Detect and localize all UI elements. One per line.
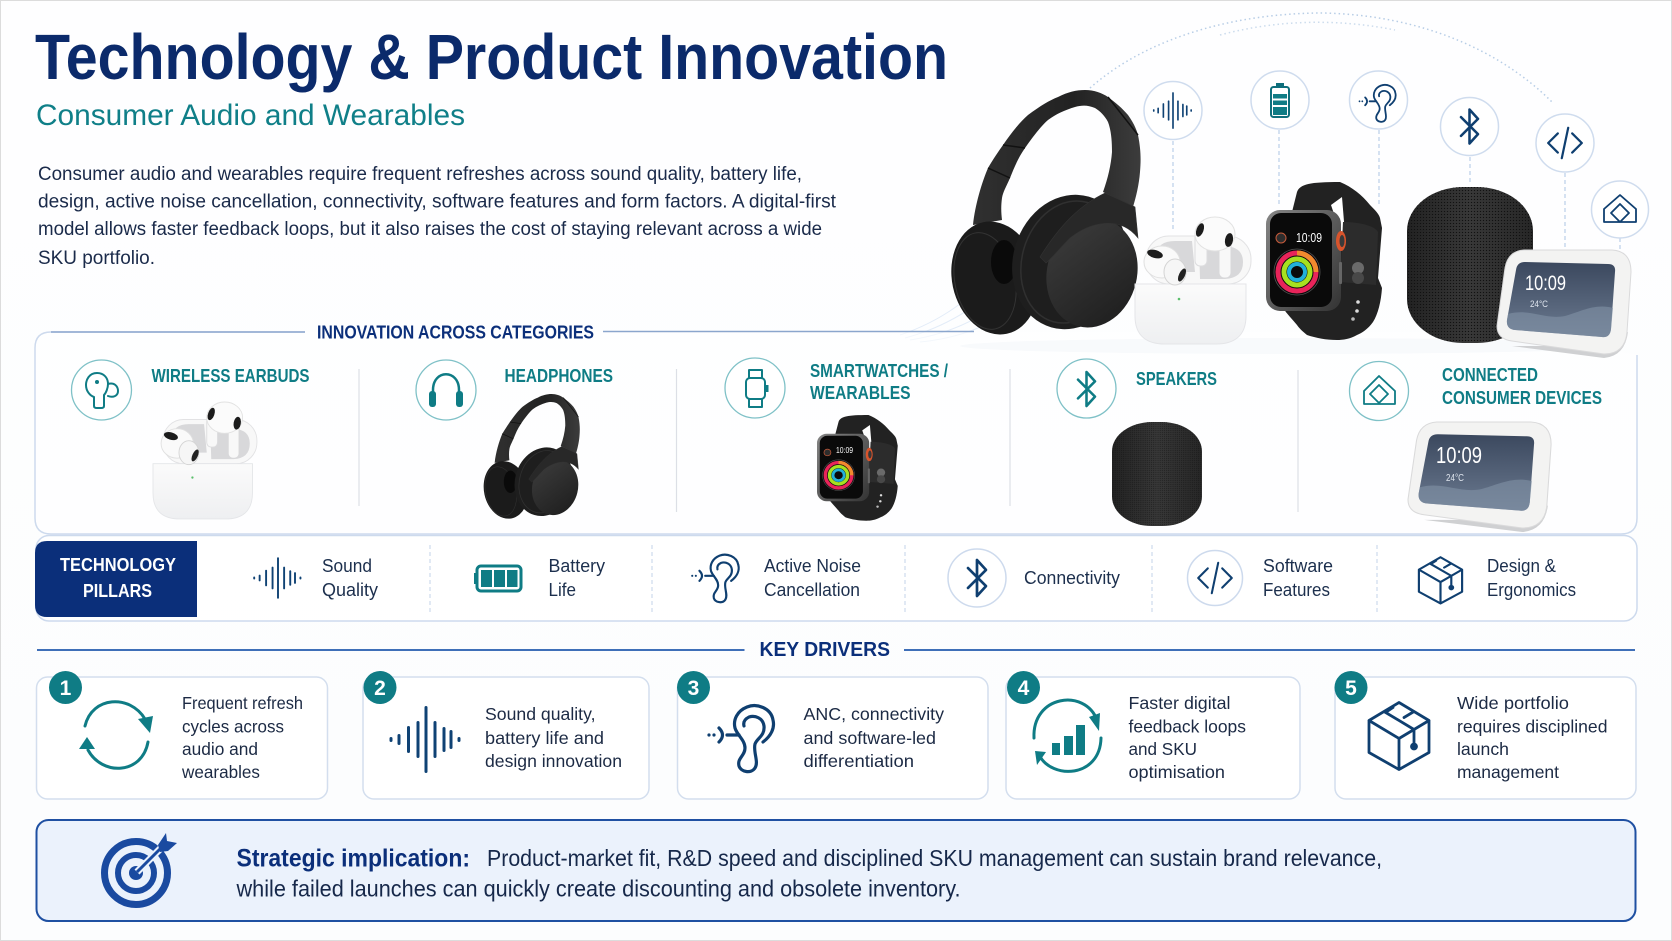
driver card 4 (1006, 671, 1300, 799)
hero icon: sound wave (1144, 82, 1202, 140)
dotted arc over hero icons (1090, 13, 1552, 102)
pillar: sound quality (254, 556, 378, 600)
category: headphones (416, 360, 613, 523)
section heading: key drivers: KEY DRIVERS (760, 639, 890, 661)
driver card 2: design innovation (485, 751, 622, 771)
category: headphones: HEADPHONES (504, 366, 613, 386)
category: connected consumer devices: CONNECTED (1442, 365, 1538, 385)
pillar: battery life: Battery (548, 556, 605, 576)
category: smartwatches and wearables: WEARABLES (810, 383, 910, 403)
driver card 1: audio and (182, 739, 258, 759)
driver card 5: requires disciplined (1457, 716, 1608, 736)
hero product: smartwatch: 10:09 (1296, 230, 1322, 245)
pillar: active noise cancellation (692, 555, 861, 602)
intro text block: model allows faster feedback loops, but it also raises the cost of staying relevant across a wide (38, 219, 822, 240)
intro text block: design, active noise cancellation, connectivity, software features and form factors. A digital-first (38, 192, 837, 212)
pillar: battery life: Life (548, 580, 576, 600)
hero icon: connected home (1592, 181, 1648, 238)
category: wireless earbuds (72, 360, 310, 519)
driver card 5: launch (1457, 739, 1509, 759)
driver card 5: management (1457, 762, 1559, 782)
pillar: connectivity: Connectivity (1024, 568, 1120, 588)
icon: refresh cycle (79, 702, 153, 768)
driver card 4: feedback loops (1128, 716, 1246, 736)
floor reflection under hero products (960, 338, 1620, 354)
pillar: software features: Software (1263, 556, 1333, 576)
category: wireless earbuds: WIRELESS EARBUDS (152, 366, 310, 386)
category: smartwatches and wearables (725, 358, 948, 521)
hero product: earbuds (1135, 217, 1251, 344)
driver card 5: Wide portfolio (1457, 693, 1569, 713)
driver card 3 (677, 671, 988, 799)
driver card 2: 2 (374, 677, 386, 700)
driver card 1: Frequent refresh (182, 693, 303, 713)
driver card 2: Sound quality, (485, 704, 596, 724)
pillar: sound quality: Quality (322, 580, 378, 600)
hero product: smartwatch (1266, 182, 1382, 340)
pillars label: PILLARS (83, 581, 152, 601)
intro text block (38, 164, 837, 269)
driver card 1: wearables (181, 762, 260, 782)
icon: feedback loop chart (1034, 700, 1101, 771)
pillar: design and ergonomics (1419, 556, 1576, 603)
pillar: software features (1188, 550, 1333, 606)
category: speakers (1057, 359, 1217, 526)
driver card 4: optimisation (1128, 762, 1225, 782)
strategic implication callout: Strategic implication: (236, 844, 470, 872)
icon: target with arrow (104, 833, 177, 904)
strategic implication callout: Product-market fit, R&D speed and disciplined SKU management can sustain brand relevance, (487, 845, 1382, 871)
category: speakers: SPEAKERS (1136, 369, 1217, 389)
hero product: headphones (941, 90, 1149, 343)
pillar: battery life (474, 556, 605, 600)
connector lines from icons to products (1173, 130, 1620, 250)
driver card 2: battery life and (485, 728, 604, 748)
pillar: sound quality: Sound (322, 556, 372, 576)
title: Technology & Product Innovation (35, 21, 948, 93)
driver card 4: 4 (1018, 677, 1030, 700)
panel: technology pillars (35, 536, 1637, 621)
pillar: design and ergonomics: Ergonomics (1487, 580, 1576, 600)
driver card 3: differentiation (804, 751, 914, 771)
pillar: active noise cancellation: Active Noise (764, 556, 861, 576)
pillars label: TECHNOLOGY (60, 555, 176, 575)
driver card 4: Faster digital (1128, 693, 1230, 713)
pillars label (35, 541, 197, 617)
category: smartwatches and wearables: 10:09 (836, 446, 853, 455)
driver card 5 (1334, 671, 1636, 799)
category: connected consumer devices: 10:09 (1436, 442, 1482, 468)
driver card 2 (363, 671, 649, 799)
panel: innovation categories (35, 332, 1637, 534)
icon: product box (1369, 702, 1429, 770)
pillar: active noise cancellation: Cancellation (764, 580, 860, 600)
strategic implication callout: while failed launches can quickly create discounting and obsolete inventory. (236, 876, 961, 902)
category: smartwatches and wearables: SMARTWATCHES / (810, 361, 948, 381)
hero icon: bluetooth (1440, 98, 1498, 156)
intro text block: SKU portfolio. (38, 248, 155, 269)
hero product: smart display (1497, 250, 1631, 358)
pillar: design and ergonomics: Design & (1487, 556, 1556, 576)
pillar: connectivity (948, 549, 1120, 607)
hero product: smart display: 10:09 (1525, 272, 1566, 295)
hero product: smart speaker (1407, 187, 1533, 343)
driver card 4: and SKU (1128, 739, 1197, 759)
background decoration: hero glow (900, 265, 1030, 342)
section heading: innovation across categories: INNOVATION ACROSS CATEGORIES (317, 322, 594, 342)
driver card 3: and software-led (804, 728, 936, 748)
driver card 1: 1 (60, 677, 72, 700)
intro text block: Consumer audio and wearables require frequent refreshes across sound quality, battery life, (38, 164, 802, 185)
icon: sound wave (391, 708, 459, 772)
hero product: smart display: 24°C (1530, 299, 1548, 310)
icon: ear with sound (709, 706, 774, 772)
pillar: software features: Features (1263, 580, 1330, 600)
category: connected consumer devices: 24°C (1446, 473, 1464, 484)
driver card 5: 5 (1345, 677, 1357, 700)
driver card 3: ANC, connectivity (804, 704, 944, 724)
hero icon: active noise cancellation ear (1350, 71, 1408, 129)
strategic implication callout (36, 820, 1636, 921)
driver card 3: 3 (688, 677, 699, 700)
category: connected consumer devices (1350, 362, 1602, 532)
hero icon: software code (1536, 114, 1594, 172)
hero icon: battery (1251, 71, 1309, 129)
driver card 1: cycles across (182, 716, 284, 736)
category: connected consumer devices: CONSUMER DEVICES (1442, 388, 1602, 408)
driver card 1 (36, 671, 328, 799)
subtitle: Consumer Audio and Wearables (36, 99, 465, 132)
